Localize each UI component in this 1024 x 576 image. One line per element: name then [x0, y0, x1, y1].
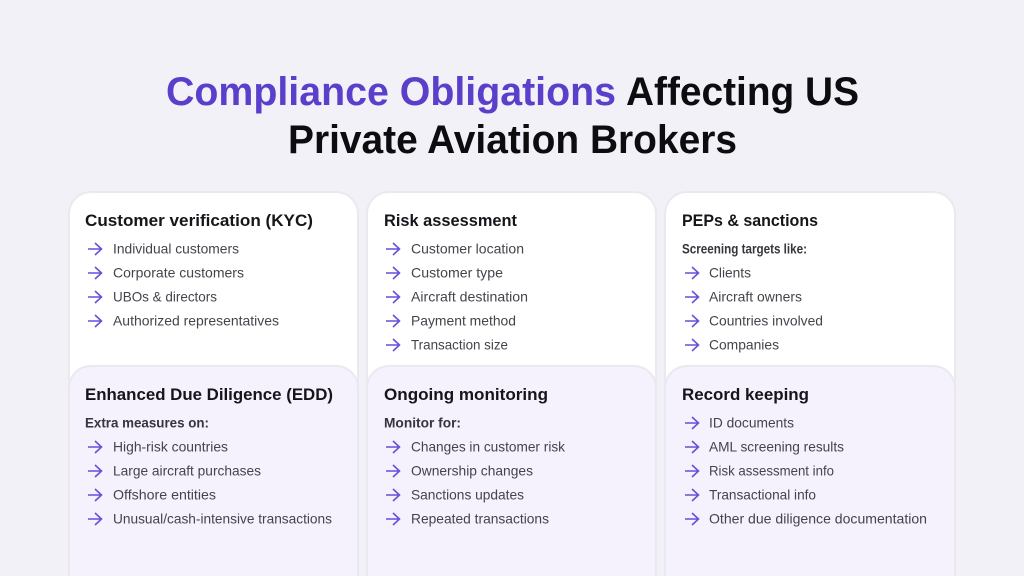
panel: customer verification: Customer verification (KYC) [85, 211, 313, 230]
panel: record keeping: AML screening results [709, 438, 844, 454]
panel: risk assessment: Customer type [411, 264, 503, 280]
panel: PEPs and sanctions: Companies [709, 336, 779, 352]
panel: PEPs and sanctions: Clients [709, 264, 751, 280]
panel: risk assessment: Aircraft destination [411, 288, 528, 304]
panel: customer verification: Individual customers [113, 240, 239, 256]
panel: record keeping [665, 366, 955, 576]
panel: customer verification: UBOs & directors [113, 288, 217, 304]
panel: ongoing monitoring: Ongoing monitoring [384, 385, 548, 404]
panel: customer verification [69, 192, 358, 400]
panel: enhanced due diligence: Offshore entities [113, 486, 216, 502]
panel: ongoing monitoring: Monitor for: [384, 414, 461, 430]
title: Compliance Obligations [166, 70, 616, 114]
panel: enhanced due diligence: High-risk countries [113, 438, 228, 454]
panel: record keeping: Risk assessment info [709, 462, 834, 478]
panel: enhanced due diligence: Extra measures on: [85, 414, 209, 430]
panel: record keeping: ID documents [709, 414, 794, 430]
panel: ongoing monitoring: Changes in customer risk [411, 438, 566, 454]
panel: ongoing monitoring: Repeated transactions [411, 510, 549, 526]
panel: record keeping: Other due diligence documentation [709, 510, 927, 526]
panel: record keeping: Record keeping [682, 385, 809, 404]
panel: PEPs and sanctions: Countries involved [709, 312, 823, 328]
panel: ongoing monitoring [367, 366, 656, 576]
panel: enhanced due diligence: Large aircraft purchases [113, 462, 261, 478]
panel: risk assessment [367, 192, 656, 400]
panel: PEPs and sanctions: Aircraft owners [709, 288, 802, 304]
panel: PEPs and sanctions: Screening targets like: [682, 240, 807, 256]
panel: customer verification: Authorized representatives [113, 312, 279, 328]
panel: record keeping: Transactional info [709, 486, 816, 502]
panel: enhanced due diligence: Enhanced Due Diligence (EDD) [85, 385, 333, 404]
panel: customer verification: Corporate customers [113, 264, 244, 280]
panel: ongoing monitoring: Sanctions updates [411, 486, 524, 502]
panel: PEPs and sanctions [665, 192, 955, 400]
panel: ongoing monitoring: Ownership changes [411, 462, 533, 478]
title: Affecting US [626, 70, 859, 114]
panel: enhanced due diligence [69, 366, 358, 576]
title: Private Aviation Brokers [288, 118, 737, 162]
panel: risk assessment: Risk assessment [384, 211, 517, 230]
panel: risk assessment: Customer location [411, 240, 524, 256]
title [166, 70, 859, 162]
panel: enhanced due diligence: Unusual/cash-intensive transactions [113, 510, 332, 526]
panel: risk assessment: Transaction size [411, 336, 508, 352]
panel: risk assessment: Payment method [411, 312, 516, 328]
panel: PEPs and sanctions: PEPs & sanctions [682, 211, 818, 230]
